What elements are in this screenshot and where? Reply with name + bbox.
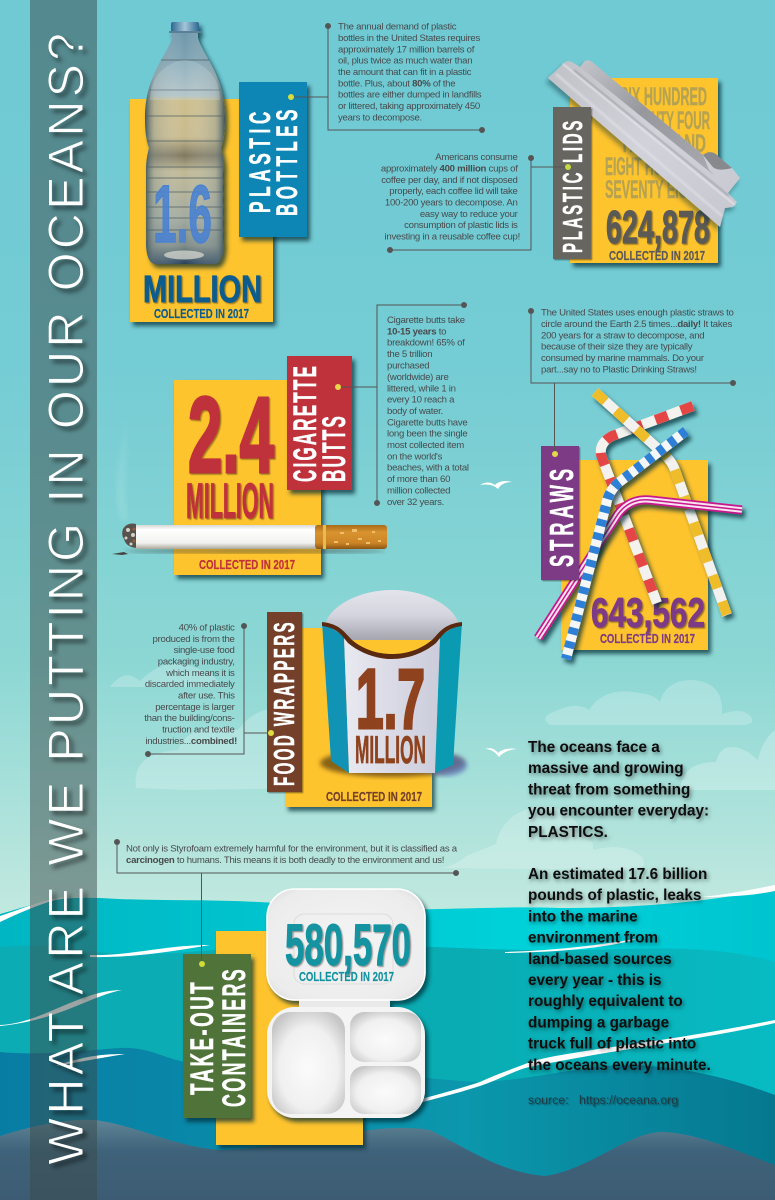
text: food: percentage is larger xyxy=(155,702,236,713)
panel: cigarette butts xyxy=(112,356,387,575)
number 1.6: 1.6 xyxy=(153,169,212,260)
text: cigarettes: Cigarette butts take xyxy=(387,315,465,326)
number: 1.7 xyxy=(356,652,425,746)
collected: COLLECTED IN 2017 xyxy=(326,789,422,804)
text: straws: circle around the Earth 2.5 times...daily! It takes xyxy=(541,319,732,330)
main text block: pounds of plastic, leaks xyxy=(528,887,701,904)
main text block: threat from something xyxy=(528,782,690,798)
label: BOTTLES xyxy=(271,105,304,216)
main text block: massive and growing xyxy=(528,760,684,777)
label xyxy=(553,107,591,259)
text: cigarettes: (worldwide) are xyxy=(387,372,449,383)
main text block: dumping a garbage xyxy=(528,1014,669,1031)
text: cigarettes: of more than 60 xyxy=(387,474,450,485)
text: lids: consumption of plastic lids is xyxy=(404,220,518,231)
callout lines: lids xyxy=(388,156,565,252)
text: lids: coffee per day, and if not disposed xyxy=(381,175,518,186)
icon: foam container xyxy=(267,889,425,1118)
text: cigarettes: 10-15 years to xyxy=(387,326,446,337)
text: bottles: or littered, taking approximately 450 xyxy=(338,101,480,112)
panel: plastic bottles xyxy=(130,22,307,322)
label xyxy=(183,954,252,1118)
text: containers: Not only is Styrofoam extremely harmful for the environment, but it is classified as a xyxy=(126,844,458,854)
icon: box shadow xyxy=(320,749,464,777)
yellow card xyxy=(216,931,363,1145)
title: WHAT ARE WE PUTTING IN OUR OCEANS? xyxy=(38,33,94,1165)
text: cigarettes: on the world's xyxy=(387,451,443,462)
text: bottles: The annual demand of plastic xyxy=(338,22,457,32)
text: straws: 200 years for a straw to decompose, and xyxy=(541,330,704,341)
number: 580,570 xyxy=(285,913,411,978)
yellow card xyxy=(174,380,321,575)
text: lids: investing in a reusable coffee cup! xyxy=(385,232,520,242)
main text block: truck full of plastic into xyxy=(528,1036,696,1053)
text: food: which means it is xyxy=(165,668,235,679)
text: bottles: oil, plus twice as much water than xyxy=(338,56,472,67)
callout lines: straws xyxy=(528,308,736,451)
text: cigarettes: beaches, with a total xyxy=(387,463,469,474)
text: lids: approximately 400 million cups of xyxy=(381,164,518,174)
icon: yellow straw xyxy=(595,392,727,615)
number: 2.4 xyxy=(188,374,274,495)
collected: COLLECTED IN 2017 xyxy=(600,631,695,646)
icon: blue straw xyxy=(566,431,686,659)
ocean waves xyxy=(0,885,775,1200)
icon: magenta straw xyxy=(538,500,742,638)
icon: food box xyxy=(322,590,462,773)
callout lines: food xyxy=(146,624,268,756)
icon: cigarette xyxy=(112,524,387,555)
panel: cigarette butts: MILLION xyxy=(186,473,274,529)
collected: COLLECTED IN 2017 xyxy=(299,969,394,984)
main text block: every year - this is xyxy=(528,972,662,989)
main text block: An estimated 17.6 billion xyxy=(528,866,707,883)
text: cigarettes: littered, while 1 in xyxy=(387,383,456,394)
text: cigarettes: over 32 years. xyxy=(387,497,444,508)
text: cigarettes: breakdown! 65% of xyxy=(387,338,465,349)
collected: COLLECTED IN 2017 xyxy=(199,557,295,572)
main text block: the oceans every minute. xyxy=(528,1057,711,1074)
text: bottles: bottles in the United States requires xyxy=(338,33,480,44)
icon: water bottle xyxy=(145,22,225,264)
bird xyxy=(485,748,517,757)
number: 624,878 xyxy=(606,201,710,253)
text: straws: The United States uses enough plastic straws to xyxy=(541,308,734,318)
label: BUTTS xyxy=(316,414,352,482)
source: source: https://oceana.org xyxy=(528,1093,678,1107)
panel: plastic lids xyxy=(548,60,740,263)
label xyxy=(267,612,302,792)
text: cigarettes: Cigarette butts have xyxy=(387,417,467,428)
text: food: produced is from the xyxy=(153,634,235,645)
main text block: PLASTICS. xyxy=(528,824,608,841)
main text block: you encounter everyday: xyxy=(528,803,709,820)
panel: food wrappers xyxy=(267,590,467,807)
text: lids: 100-200 years to decompose. An xyxy=(385,198,518,208)
text: lids: properly, each coffee lid will take xyxy=(389,186,518,197)
callout lines: bottles xyxy=(294,24,484,132)
text: straws: because of their size they are typically xyxy=(541,342,693,353)
text: food: discarded immediately xyxy=(145,679,235,690)
panel: food wrappers: MILLION xyxy=(355,729,426,772)
text: bottles: the amount that can fit in a plastic xyxy=(338,67,472,78)
icon: red straw xyxy=(601,406,693,603)
panel: take-out containers xyxy=(183,889,425,1145)
label: PLASTIC xyxy=(244,107,277,213)
text: food: than the building/cons- xyxy=(144,713,235,724)
yellow card xyxy=(285,628,432,807)
text: bottles: bottles are either dumped in landfills xyxy=(338,90,482,101)
text: cigarettes: most collected item xyxy=(387,440,464,451)
clouds xyxy=(110,663,775,870)
panel: straws xyxy=(538,392,742,659)
words behind lid xyxy=(605,83,710,204)
main text block: environment from xyxy=(528,930,658,947)
label: FOOD WRAPPERS xyxy=(269,620,301,786)
label xyxy=(239,82,307,237)
text: bottles: approximately 17 million barrels of xyxy=(338,44,475,55)
main text block: The oceans face a xyxy=(528,739,660,756)
bird xyxy=(480,481,512,489)
callout lines: containers xyxy=(114,840,458,961)
text: food: 40% of plastic xyxy=(179,622,235,634)
icon: coffee lid xyxy=(548,60,740,227)
text: cigarettes: every 10 reach a xyxy=(387,395,455,406)
yellow card xyxy=(130,99,273,322)
label: STRAWS xyxy=(543,465,580,567)
text: food: truction and textile xyxy=(162,724,235,736)
text: containers: carcinogen to humans. This means it is both deadly to the environment and us! xyxy=(126,855,444,866)
text: cigarettes: the 5 trillion xyxy=(387,349,432,360)
label: TAKE-OUT xyxy=(184,980,220,1095)
main text block: into the marine xyxy=(528,908,638,925)
text: food: after use. This xyxy=(178,690,235,702)
main text block: roughly equivalent to xyxy=(528,993,683,1010)
words behind lid: THOUSAND xyxy=(620,130,706,158)
icon: blue shadow xyxy=(423,754,467,776)
yellow card xyxy=(570,78,718,263)
text: lids: Americans consume xyxy=(435,152,518,163)
collected: COLLECTED IN 2017 xyxy=(154,306,249,321)
text: cigarettes: body of water. xyxy=(387,406,443,417)
label: CIGARETTE xyxy=(287,364,323,482)
text: straws: part...say no to Plastic Drinking Straws! xyxy=(541,364,697,375)
text: bottles: years to decompose. xyxy=(338,112,422,124)
text: straws: consumed by marine mammals. Do your xyxy=(541,353,705,364)
side band xyxy=(30,0,97,1200)
text: cigarettes: million collected xyxy=(387,485,450,496)
text: food: industries...combined! xyxy=(145,736,237,747)
text: lids: easy way to reduce your xyxy=(420,209,519,220)
million: MILLION xyxy=(143,269,262,311)
main text block: land-based sources xyxy=(528,951,672,968)
callout lines: cigarettes xyxy=(341,302,466,506)
label xyxy=(541,446,580,580)
label: CONTAINERS xyxy=(216,967,252,1107)
text: cigarettes: purchased xyxy=(387,360,429,371)
label: PLASTIC LIDS xyxy=(557,118,588,253)
text: food: single-use food xyxy=(174,645,235,656)
number: 643,562 xyxy=(591,589,705,636)
text: bottles: bottle. Plus, about 80% of the xyxy=(338,78,455,89)
text: cigarettes: long been the single xyxy=(387,429,467,440)
yellow card xyxy=(561,460,708,650)
label xyxy=(287,356,352,490)
smoke wisp xyxy=(116,400,128,520)
collected: COLLECTED IN 2017 xyxy=(609,248,705,263)
text: food: packaging industry, xyxy=(158,656,235,668)
